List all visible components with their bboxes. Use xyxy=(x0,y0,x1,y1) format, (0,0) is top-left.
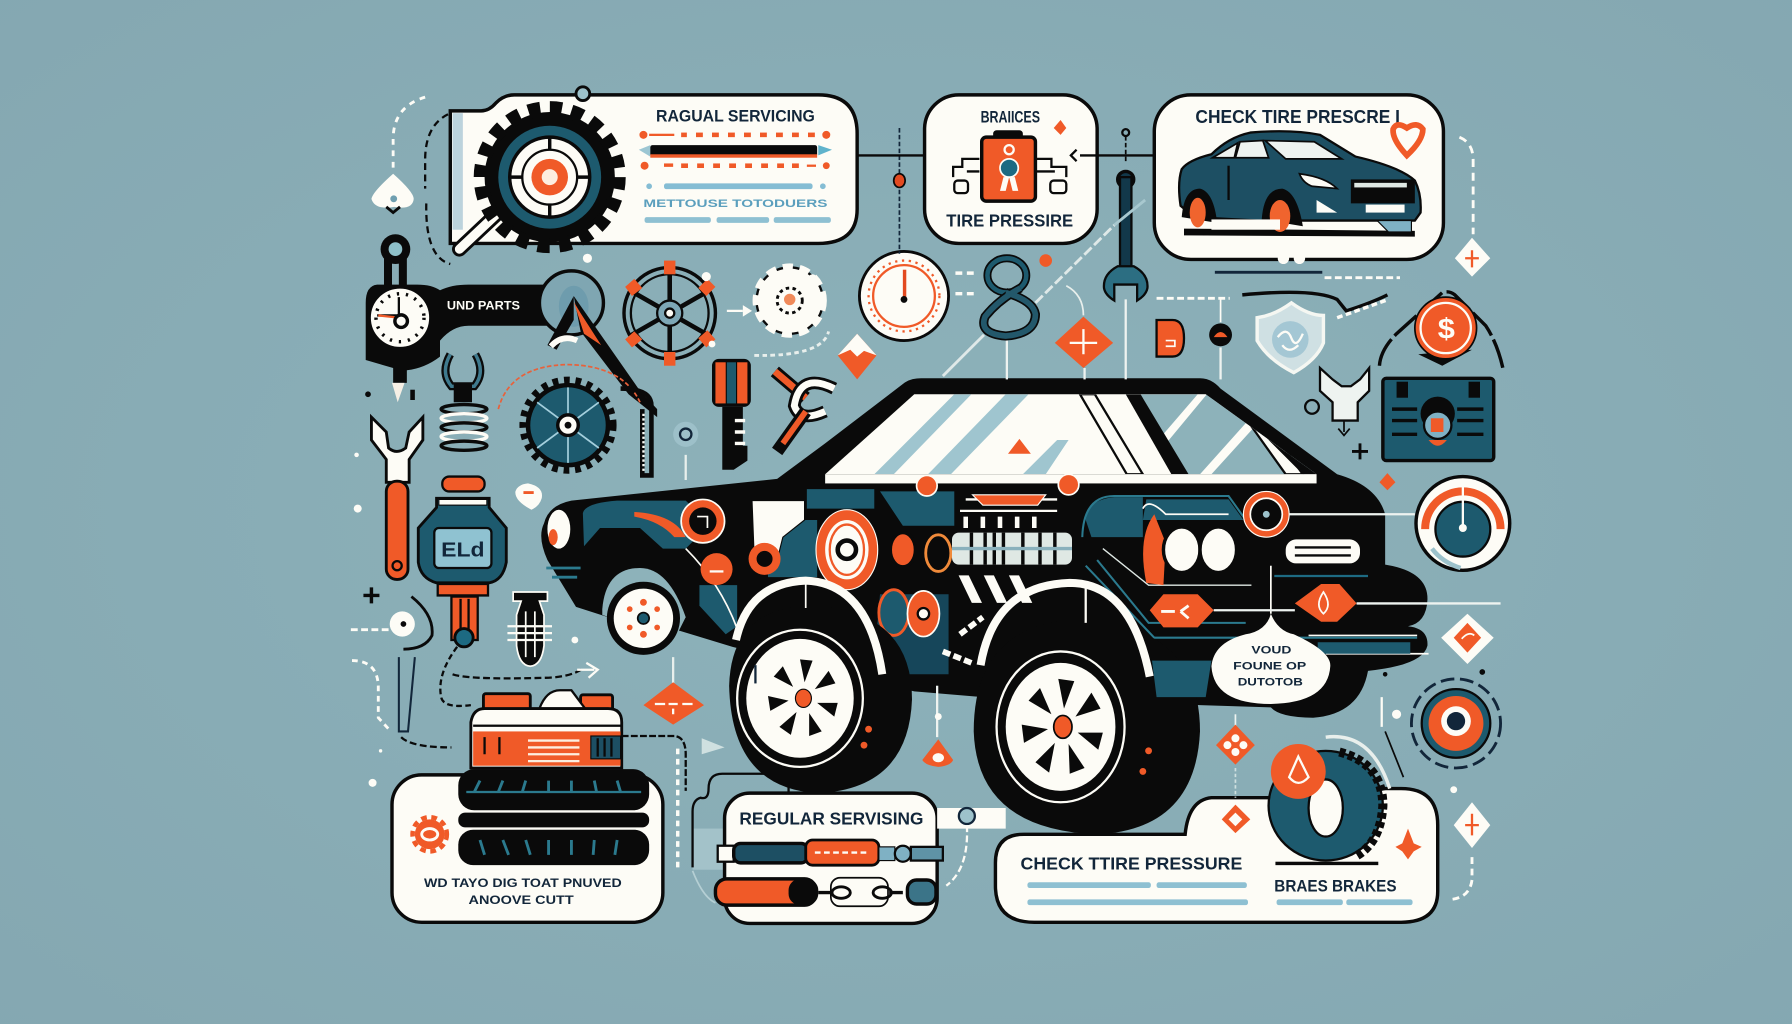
small dots and lines lower right xyxy=(1382,669,1485,793)
badge orange rings xyxy=(681,474,1079,637)
icon: ring node xyxy=(351,597,432,649)
dashed wire from battery xyxy=(622,736,686,869)
pencil bar xyxy=(639,145,832,158)
orange dot xyxy=(1039,254,1052,267)
blue rule xyxy=(646,183,826,189)
rear lower teal xyxy=(1152,661,1211,697)
caption: BRAES BRAKES xyxy=(1274,876,1397,895)
icon: orange spark xyxy=(1395,829,1422,859)
front fender orange stripe xyxy=(634,512,686,537)
speech bubble xyxy=(1211,566,1330,704)
icon: upper wrench xyxy=(445,354,480,402)
front tyre xyxy=(729,606,912,793)
icon: orange diamond left xyxy=(643,657,704,725)
small plus xyxy=(1352,443,1368,459)
rear teal panel xyxy=(1086,497,1243,537)
icon: bomb clip xyxy=(507,592,552,666)
icon: digital gauge: ELd xyxy=(441,539,485,562)
engine teal sections xyxy=(768,489,954,577)
rear vent xyxy=(1286,539,1360,563)
dashed path to diamond xyxy=(754,331,829,355)
headlight xyxy=(546,509,571,550)
icon: wheel with orange brackets xyxy=(624,261,715,366)
icon: rear gauge xyxy=(1416,477,1510,570)
icon: orange gear xyxy=(413,817,447,851)
icon: orange wrench xyxy=(775,371,834,451)
grille lines xyxy=(546,568,581,577)
lower front teal xyxy=(699,585,737,634)
blue bars xyxy=(1027,882,1413,905)
panel: check tire pressure xyxy=(1154,95,1443,259)
caption: TIRE PRESSIRE xyxy=(946,210,1073,230)
icon: ring xyxy=(1209,323,1232,346)
illustration: small car xyxy=(1179,131,1421,237)
icon: upper pipe xyxy=(718,840,943,865)
main car xyxy=(541,378,1429,834)
cream engine panel xyxy=(752,501,805,560)
icon: cream diamond xyxy=(1441,614,1494,664)
arrow: servicing to brakes xyxy=(857,150,945,161)
label: UND PARTS xyxy=(447,299,520,313)
icon: orange drop xyxy=(922,713,953,767)
blue bars xyxy=(645,217,831,223)
icon: control box xyxy=(1383,378,1494,461)
orange dashed rule xyxy=(639,131,830,139)
icon: key tool xyxy=(712,359,751,470)
belt line xyxy=(825,474,1317,483)
icon: dial ring xyxy=(1411,679,1501,768)
windows xyxy=(825,394,1320,474)
note text: WD TAYO DIG TOAT PNUVED xyxy=(424,876,622,890)
small diamond xyxy=(1379,473,1395,490)
icon: top right diamond xyxy=(1455,238,1490,277)
speech bubble: VOUD xyxy=(1251,645,1291,657)
connector beside lower panel xyxy=(937,808,1006,886)
connector from gauge to battery xyxy=(440,647,598,706)
front wheel arch xyxy=(736,581,882,674)
heading: REGULAR SERVISING xyxy=(739,809,923,829)
front fender xyxy=(583,501,711,549)
icon: small ring xyxy=(673,422,698,480)
bumper lines xyxy=(1309,635,1429,654)
dashed path lower right xyxy=(1451,857,1472,899)
small front wheel xyxy=(607,582,680,655)
icon: heart xyxy=(1393,125,1423,155)
heading: BRAIICES xyxy=(981,107,1040,126)
icon: lower right diamond xyxy=(1454,802,1490,848)
dashed link to ring xyxy=(1157,298,1230,322)
rear cream line xyxy=(1103,549,1251,585)
orange lens ring xyxy=(1243,491,1289,537)
small ring xyxy=(1305,400,1319,414)
icon: magnifier handle xyxy=(459,213,498,249)
icon: large gear xyxy=(481,109,618,246)
plus xyxy=(363,587,379,603)
tool: gauge wrench with label xyxy=(366,234,549,402)
connector line to gauge xyxy=(894,128,905,254)
orange diamond xyxy=(1054,120,1066,135)
icon: lower chain tube xyxy=(715,878,936,906)
scattered dots xyxy=(354,254,817,787)
icon: coin badge: $ xyxy=(1438,313,1455,345)
panel: brakes xyxy=(925,95,1097,243)
icon: orange drop badge xyxy=(1295,584,1357,622)
car callout lines xyxy=(937,299,1501,737)
icon: red-handled wrench xyxy=(371,417,423,579)
icon: chain link xyxy=(984,258,1035,336)
rear tyre xyxy=(974,619,1200,834)
engine cylinders xyxy=(943,499,1072,663)
subtext: METTOUSE TOTODUERS xyxy=(643,198,828,210)
icon: digital gauge xyxy=(418,477,506,647)
heading: regular servicing: RAGUAL SERVICING xyxy=(656,107,815,126)
icon: spade marker xyxy=(371,174,414,213)
dashed path right xyxy=(1459,137,1473,234)
heading: CHECK TIRE PRESCRE I xyxy=(1195,106,1400,127)
rear wheel arch xyxy=(981,583,1150,677)
icon: battery xyxy=(471,690,622,768)
orange dashed rule lower xyxy=(641,162,830,170)
dial xyxy=(370,288,430,347)
icon: teal toothed wheel xyxy=(523,381,613,470)
icon: orange small diamonds xyxy=(1216,714,1255,833)
arrow: small to gear xyxy=(727,305,752,317)
panel: bottom left note xyxy=(392,775,663,922)
dashed lines left xyxy=(352,657,451,747)
small black dots xyxy=(365,390,755,683)
icon: long wrench xyxy=(1104,129,1148,301)
icon: orange fold diamond xyxy=(838,334,877,379)
icon: tiny flag xyxy=(702,738,725,754)
body silhouette xyxy=(541,378,1427,718)
small heart bubble xyxy=(515,483,542,510)
connector: top ring xyxy=(576,87,590,101)
speech bubble: FOUNE OP xyxy=(1233,661,1307,673)
arrow: tire pressure to brakes xyxy=(1071,150,1154,161)
icon: ruler xyxy=(621,389,651,475)
speech bubble: DUTOTOB xyxy=(1238,677,1303,689)
icon: shield xyxy=(1257,303,1323,373)
note text line two: ANOOVE CUTT xyxy=(469,893,575,907)
front arch cutout xyxy=(602,568,686,640)
heading: CHECK TTIRE PRESSURE xyxy=(1021,854,1242,874)
icon: orange card xyxy=(953,130,1066,201)
icon: stacked tyres xyxy=(458,769,649,865)
icon: orange diamond xyxy=(1055,286,1113,368)
icon: cream wrench xyxy=(1320,368,1369,435)
decorative diagonal xyxy=(943,200,1145,376)
dashes beside link xyxy=(955,273,974,294)
icon: tyre with orange badge xyxy=(1269,737,1390,865)
connector below car panel xyxy=(1215,253,1400,318)
engine lower teal xyxy=(874,594,949,674)
panel: regular servicing lower xyxy=(693,774,943,923)
top orange trim xyxy=(973,495,1046,505)
dashed arc above wheel xyxy=(498,365,640,409)
icon: coin badge xyxy=(1379,292,1503,368)
icon: orange D xyxy=(1157,320,1184,357)
gauge: round dial xyxy=(859,251,949,341)
panel: check tire pressure and brakes xyxy=(995,789,1438,922)
rear outline lines xyxy=(1082,496,1417,638)
dashed path left xyxy=(393,97,425,169)
icon: orange hex badge xyxy=(1150,594,1214,627)
icon: ring with orange pointer xyxy=(539,271,657,417)
panel: regular servicing xyxy=(450,95,857,243)
rear teal stripe xyxy=(1274,575,1368,577)
icon: bumpy gear xyxy=(755,266,824,335)
icon: window marker xyxy=(1008,439,1031,454)
dashed path around gear xyxy=(425,114,450,264)
icon: spring xyxy=(441,405,487,450)
tail lamp cluster xyxy=(1143,504,1237,585)
